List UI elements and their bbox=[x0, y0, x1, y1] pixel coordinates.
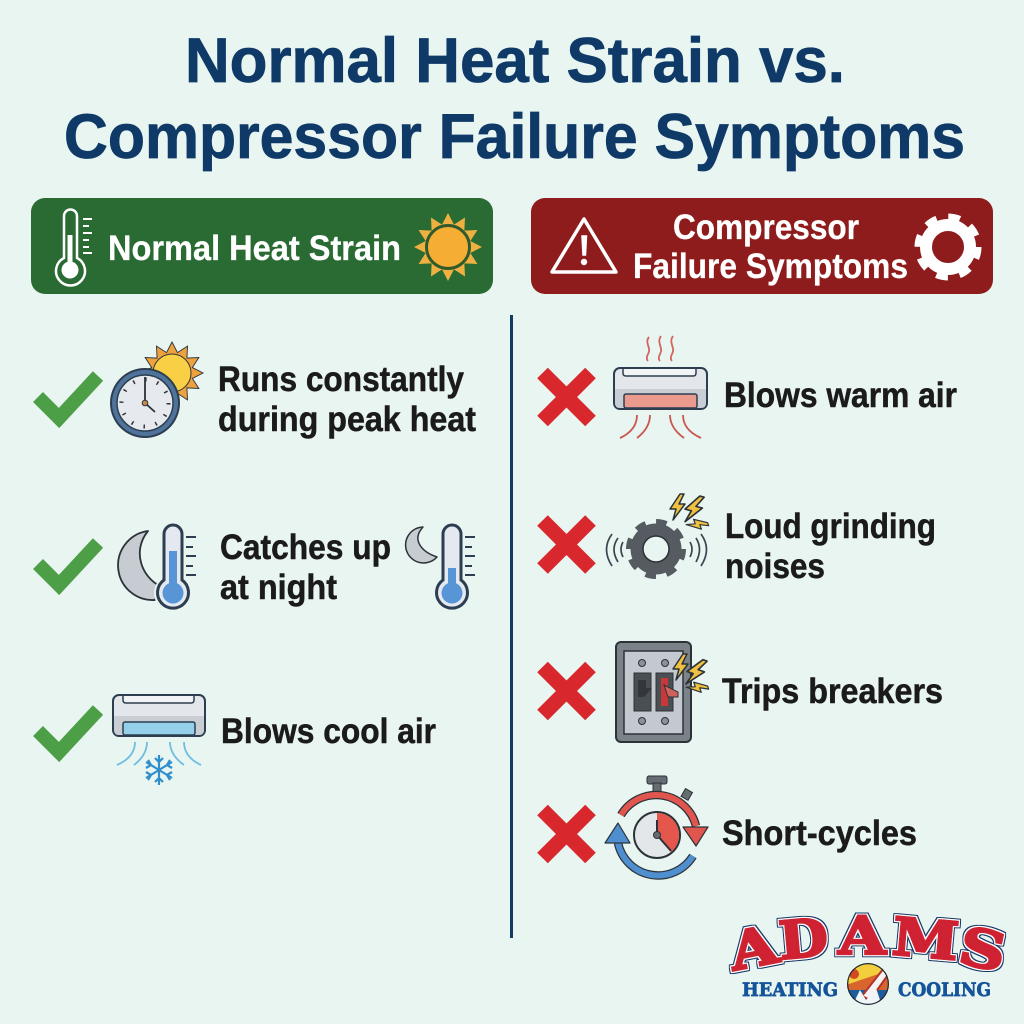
header text: compressor failure symptoms bbox=[633, 208, 908, 286]
icon: cross bbox=[542, 810, 590, 858]
icon: noisy gear bbox=[606, 493, 709, 575]
text: catches up at night: Catches up bbox=[220, 528, 391, 567]
panel: normal heat strain header bbox=[31, 198, 493, 294]
text: runs constantly during peak heat: Runs constantly bbox=[218, 360, 464, 399]
logo: adams heating cooling bbox=[728, 912, 1006, 1005]
icon: cross bbox=[542, 373, 590, 421]
icon: check bbox=[38, 543, 98, 585]
icon: moon and thermometer bbox=[118, 525, 196, 612]
header text: compressor failure symptoms: Failure Symptoms bbox=[633, 247, 908, 286]
text: loud grinding noises: noises bbox=[725, 547, 825, 586]
logo wordmark: adams: A bbox=[724, 915, 784, 983]
text: blows cool air: Blows cool air bbox=[221, 712, 436, 751]
icon: cooling air conditioner bbox=[113, 695, 205, 785]
text: loud grinding noises: Loud grinding bbox=[725, 507, 936, 546]
text: short-cycles: Short-cycles bbox=[722, 814, 917, 853]
panel: compressor failure header bbox=[531, 198, 993, 294]
header text: normal heat strain: Normal Heat Strain bbox=[108, 229, 401, 268]
title: Compressor Failure Symptoms bbox=[64, 102, 965, 172]
logo wordmark: adams: A bbox=[837, 906, 887, 967]
icon: header gear bbox=[920, 219, 976, 275]
icon: small moon and thermometer bbox=[406, 525, 475, 608]
logo wordmark: adams: M bbox=[890, 906, 961, 973]
icon: tripped breaker panel bbox=[616, 642, 709, 742]
logo emblem bbox=[846, 962, 890, 1006]
row: loud grinding noises bbox=[542, 493, 936, 586]
icon: check bbox=[38, 710, 98, 752]
row: runs constantly bbox=[38, 342, 476, 439]
logo text: cooling: COOLING bbox=[898, 979, 991, 1001]
title: Normal Heat Strain vs. bbox=[185, 26, 845, 96]
header text: compressor failure symptoms: Compressor bbox=[673, 208, 859, 247]
text: catches up at night: at night bbox=[220, 568, 337, 607]
icon: header sun bbox=[414, 213, 482, 281]
icon: warm air conditioner bbox=[614, 336, 707, 438]
icon: cross bbox=[542, 667, 590, 715]
text: runs constantly during peak heat: during peak heat bbox=[218, 400, 476, 439]
icon: stopwatch with cycle arrows bbox=[605, 776, 708, 875]
icon: cross bbox=[542, 520, 590, 568]
row: trips breakers bbox=[542, 642, 943, 742]
text: trips breakers: Trips breakers bbox=[722, 672, 943, 711]
logo text: heating: HEATING bbox=[742, 979, 838, 1001]
title bbox=[64, 26, 965, 172]
logo wordmark: adams bbox=[724, 906, 1011, 984]
icon: check bbox=[38, 376, 98, 418]
text: runs constantly during peak heat bbox=[218, 360, 476, 439]
row: blows warm air bbox=[542, 336, 957, 438]
text: blows warm air: Blows warm air bbox=[724, 376, 957, 415]
icon: clock and sun bbox=[110, 342, 203, 438]
row: catches up at night bbox=[38, 525, 475, 612]
logo wordmark: adams: S bbox=[954, 915, 1011, 984]
row: blows cool air bbox=[38, 695, 436, 785]
text: loud grinding noises bbox=[725, 507, 936, 586]
row: short-cycles bbox=[542, 776, 917, 875]
icon: warning triangle bbox=[552, 219, 616, 272]
center divider bbox=[510, 315, 513, 938]
logo wordmark: adams: D bbox=[776, 906, 830, 972]
text: catches up at night bbox=[220, 528, 391, 607]
icon: header thermometer bbox=[56, 210, 92, 285]
